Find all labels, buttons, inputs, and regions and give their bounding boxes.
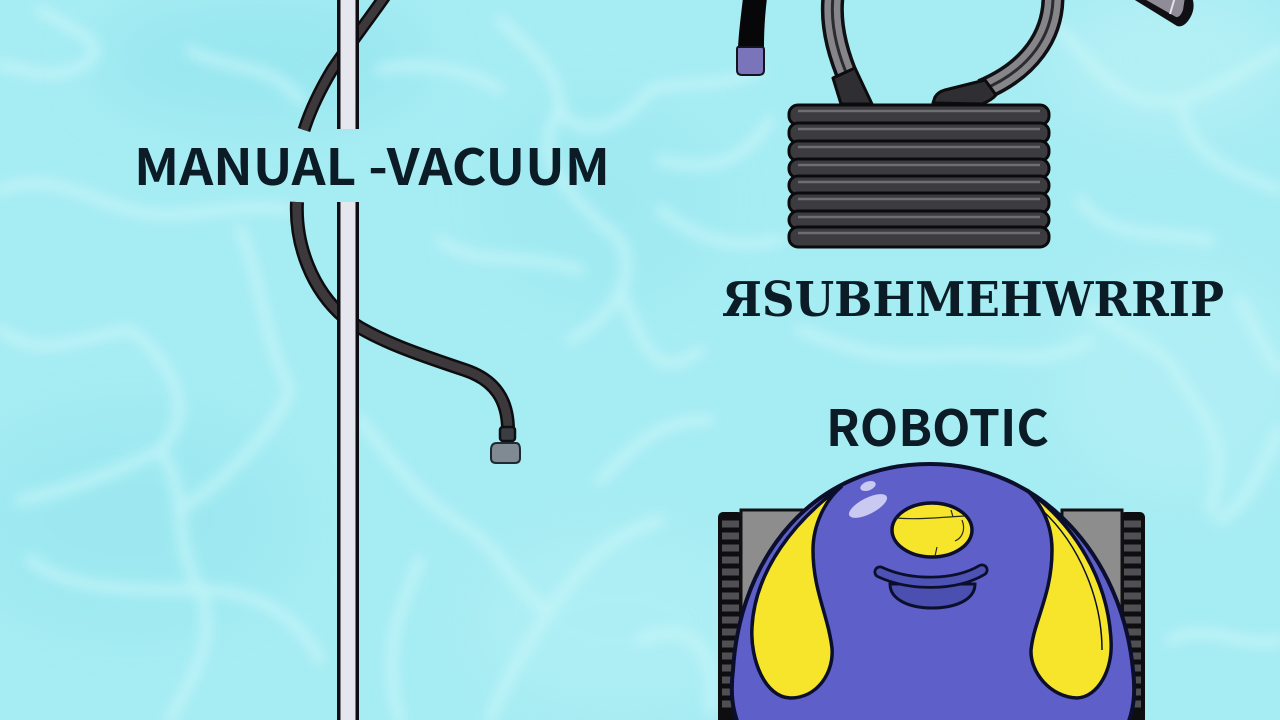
manual vacuum: hose behind pole, upper part (304, 0, 385, 130)
icon: handle and scoop (880, 570, 982, 608)
gray hose end, top right (1130, 0, 1194, 26)
icon: right yellow panel (1027, 490, 1111, 698)
icon: nozzle (491, 443, 520, 463)
icon: purple hose cap (737, 47, 764, 75)
icon: right track (1120, 512, 1145, 720)
icon: left yellow panel (752, 486, 842, 698)
manual vacuum: pole, upper segment (337, 0, 359, 129)
gray coiled hose loop (832, 0, 1053, 90)
icon: right gray plate (1062, 510, 1122, 610)
icon: body highlights (846, 479, 890, 523)
icon: left gray plate (741, 510, 806, 610)
manual vacuum: pole, lower segment (337, 202, 359, 720)
icon: hose connector (500, 427, 515, 441)
coiled hose stack (789, 105, 1049, 247)
heading: manual vacuum: MANUAL -VACUUM (134, 128, 610, 200)
robot body (732, 464, 1134, 720)
heading: robotic: ROBOTIC (826, 389, 1049, 461)
icon: left track (718, 512, 743, 720)
black hose with purple cap (737, 0, 767, 75)
icon: left hose connector (833, 68, 872, 104)
icon: right hose connector (933, 80, 996, 104)
manual vacuum: hose with nozzle, lower part (297, 202, 520, 463)
heading: garbled submersible label: ЯSUBHMEHWRRIP (722, 272, 1224, 328)
robotic cleaner (718, 464, 1145, 720)
icon: yellow oval port (892, 503, 972, 557)
